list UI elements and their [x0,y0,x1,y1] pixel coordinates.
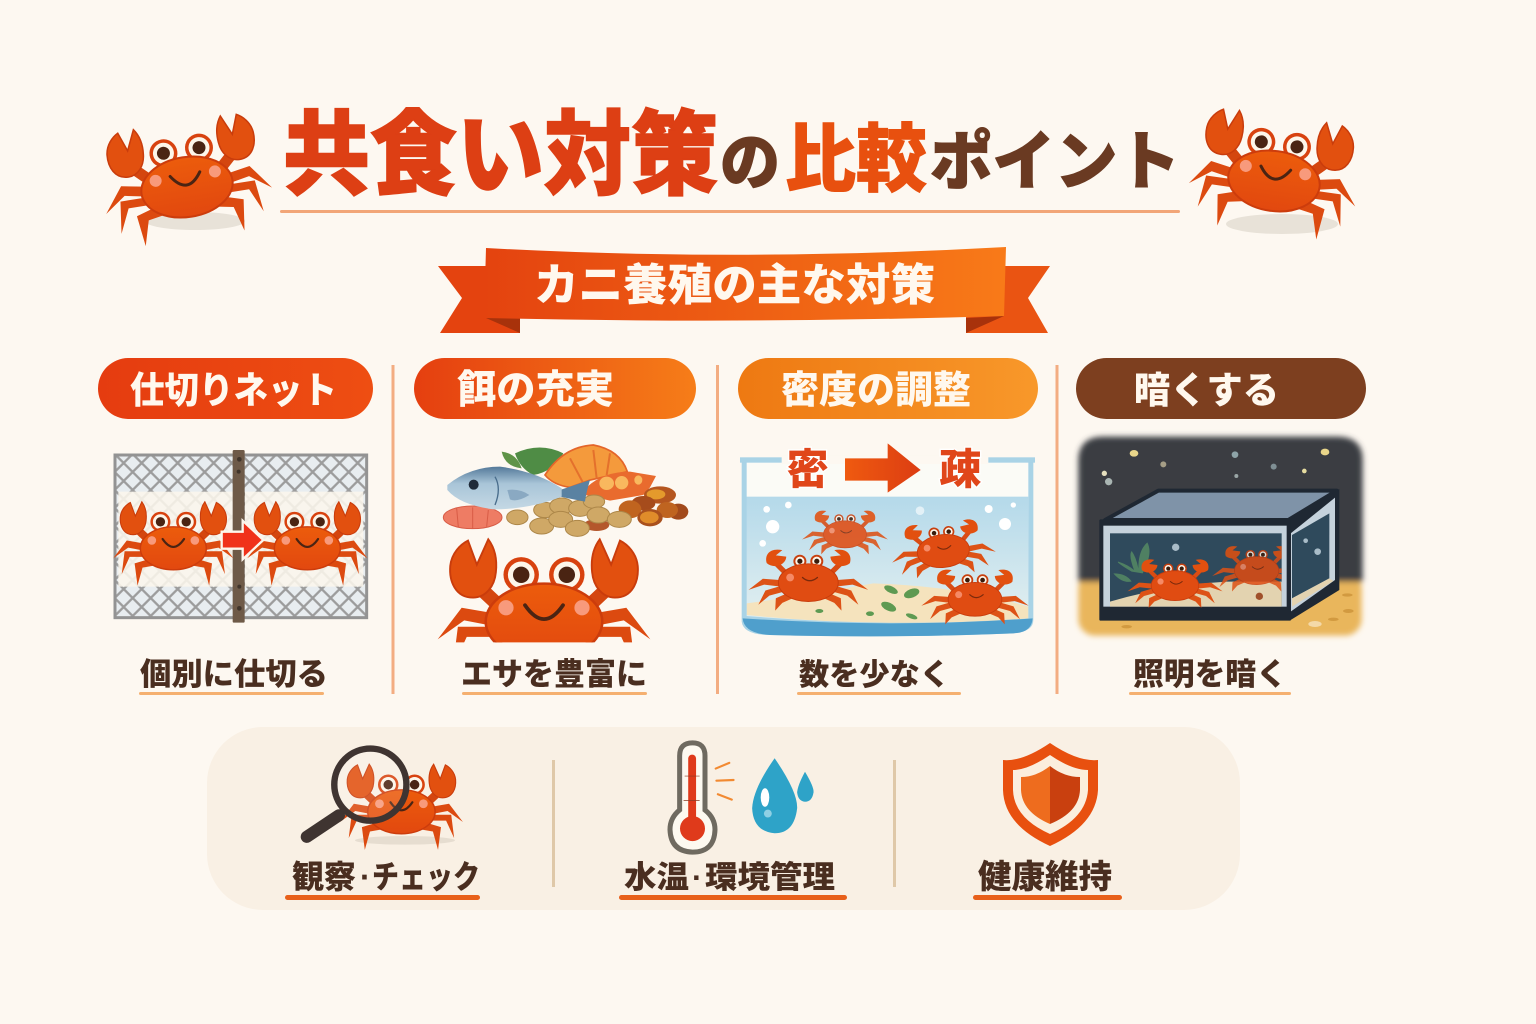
panel: 暗くする [1076,358,1366,695]
icon: title crab right [1184,105,1366,244]
title: の [720,129,780,198]
caption: 個別に仕切る [140,657,328,692]
label: sparse: 疎 [939,446,981,493]
panel: 仕切りネット [98,358,373,695]
label: 水温: 水温 [624,860,689,895]
panel: 餌の充実 [414,358,696,695]
banner ribbon [438,247,1050,333]
heading pill: 餌の充実 [457,369,614,412]
title: 比較 [785,118,927,201]
icon: shield [1003,743,1098,846]
caption: 数を少なく [799,659,950,692]
label: dense: 密 [787,446,829,493]
illustration: net with two crabs [113,450,368,623]
heading pill: 密度の調整 [781,370,971,412]
label: 観察: チェック [372,859,480,895]
icon: magnifier over crab [307,749,463,850]
label: 観察: 観察 [292,859,356,895]
caption: 照明を暗く [1133,657,1287,692]
icon: water drops [752,758,814,833]
illustration: dark tank [1078,437,1363,636]
heading pill [738,358,1038,419]
label: 健康維持: 健康維持 [978,858,1112,895]
heading pill: 暗くする [1134,370,1279,411]
icon: title crab left [94,110,278,252]
caption: エサを豊富に [461,657,647,692]
heading pill: 仕切りネット [130,370,337,411]
title: ポイント [930,126,1180,198]
title: 共食い対策 [283,105,718,207]
label: 水温 [619,860,847,900]
heading pill [414,358,696,419]
banner text: カニ養殖の主な対策 [534,261,935,310]
bottom panel [207,727,1240,910]
arrow [845,443,921,493]
panel: 密度の調整 [738,358,1038,695]
heading pill [1076,358,1366,419]
label: 観察: · [360,859,371,895]
heading pill [98,358,373,419]
illustration: tank with crabs [740,443,1035,636]
icon: thermometer [670,743,734,852]
label: 水温: 環境管理 [705,860,835,895]
label: 観察 [285,859,480,900]
illustration: food pile [438,444,688,642]
label: 水温: · [692,860,702,895]
title [283,105,1180,207]
